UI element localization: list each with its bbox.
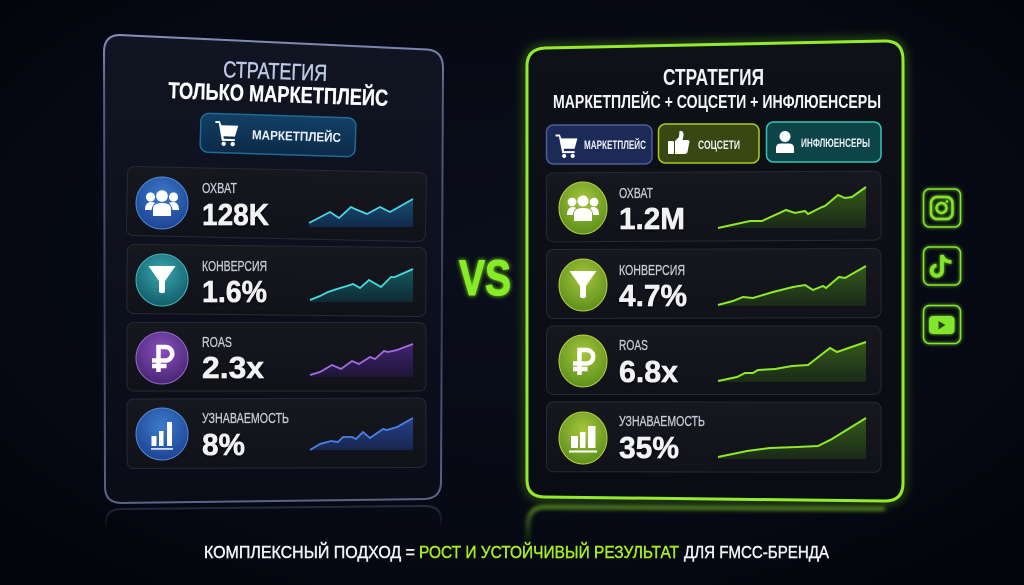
chip: social: [658, 124, 759, 163]
metric row: conversion: [546, 248, 881, 319]
VS label: VS: [459, 250, 511, 306]
heading line 2: ТОЛЬКО МАРКЕТПЛЕЙС: [168, 76, 389, 111]
left panel card: [104, 35, 443, 503]
metric row: ROAS: [127, 322, 426, 391]
row card: [546, 326, 881, 394]
row card: [126, 166, 427, 242]
chip: marketplace: [200, 113, 356, 157]
metric label: КОНВЕРСИЯ: [619, 262, 685, 279]
social icons column: [924, 189, 960, 344]
metric label: ОХВАТ: [619, 185, 653, 202]
metric label: ROAS: [202, 334, 232, 351]
row card: [546, 402, 881, 472]
icon: bars: [136, 408, 188, 460]
metric value: 6.8x: [619, 354, 679, 389]
sparkline: [718, 266, 866, 306]
icon: youtube: [924, 306, 960, 344]
panel: only marketplace strategy: [104, 35, 443, 530]
sparkline: [718, 418, 866, 459]
heading line 1: СТРАТЕГИЯ: [663, 64, 764, 90]
icon: ruble: [559, 335, 607, 387]
chip label: СОЦСЕТИ: [698, 138, 740, 152]
left panel reflection: [106, 506, 441, 530]
metric row: reach: [126, 166, 427, 242]
row card: [546, 171, 881, 242]
icon: funnel: [559, 259, 607, 311]
metric label: УЗНАВАЕМОСТЬ: [619, 413, 705, 430]
row card: [127, 244, 426, 317]
slogan start: КОМПЛЕКСНЫЙ ПОДХОД =: [204, 541, 415, 562]
slogan highlight: РОСТ И УСТОЙЧИВЫЙ РЕЗУЛЬТАТ: [419, 541, 679, 562]
metric value: 2.3x: [202, 350, 265, 385]
right panel reflection: [528, 507, 885, 545]
sparkline: [309, 199, 413, 227]
sparkline: [310, 344, 413, 377]
row card: [546, 248, 881, 319]
icon: person: [776, 131, 794, 153]
metric value: 35%: [619, 430, 679, 465]
chip: marketplace: [546, 125, 652, 164]
metric value: 128K: [202, 197, 270, 232]
icon: cart: [556, 135, 577, 158]
icon: funnel: [136, 254, 188, 306]
icon: people: [559, 182, 607, 234]
icon: cart: [215, 121, 238, 146]
heading line 2: МАРКЕТПЛЕЙС + СОЦСЕТИ + ИНФЛЮЕНСЕРЫ: [553, 91, 881, 112]
icon: ruble: [136, 332, 188, 384]
metric row: ROAS: [546, 326, 881, 394]
metric value: 4.7%: [619, 278, 687, 313]
metric row: conversion: [127, 244, 426, 317]
metric value: 1.6%: [202, 274, 267, 309]
chip: influencers: [766, 122, 881, 162]
left heading: [168, 56, 389, 111]
chip label: МАРКЕТПЛЕЙС: [252, 127, 342, 145]
icon: tiktok: [924, 247, 960, 285]
icon: thumbs up: [668, 131, 690, 154]
sparkline: [718, 187, 866, 228]
metric label: КОНВЕРСИЯ: [202, 258, 267, 275]
icon: instagram: [924, 189, 960, 227]
metric row: awareness: [127, 398, 426, 469]
metric row: reach: [546, 171, 881, 242]
metric label: УЗНАВАЕМОСТЬ: [202, 410, 289, 427]
sparkline: [718, 342, 866, 382]
right panel card: [527, 41, 903, 501]
right heading: [553, 64, 881, 112]
panel: combined strategy: [527, 41, 903, 545]
sparkline: [310, 418, 413, 450]
metric row: awareness: [546, 402, 881, 472]
metric value: 8%: [202, 427, 245, 462]
slogan end: ДЛЯ FMCC-БРЕНДА: [684, 542, 829, 562]
row card: [127, 322, 426, 391]
icon: bars: [559, 412, 607, 464]
row card: [127, 398, 426, 469]
chip label: МАРКЕТПЛЕЙС: [584, 137, 646, 152]
sparkline: [310, 269, 413, 302]
footer slogan: [204, 541, 829, 562]
icon: people: [136, 177, 188, 229]
right panel glow: [527, 41, 903, 501]
metric value: 1.2M: [619, 201, 685, 236]
metric label: ROAS: [619, 337, 648, 354]
heading line 1: СТРАТЕГИЯ: [223, 56, 328, 86]
metric label: ОХВАТ: [202, 180, 237, 197]
chip label: ИНФЛЮЕНСЕРЫ: [801, 136, 870, 150]
